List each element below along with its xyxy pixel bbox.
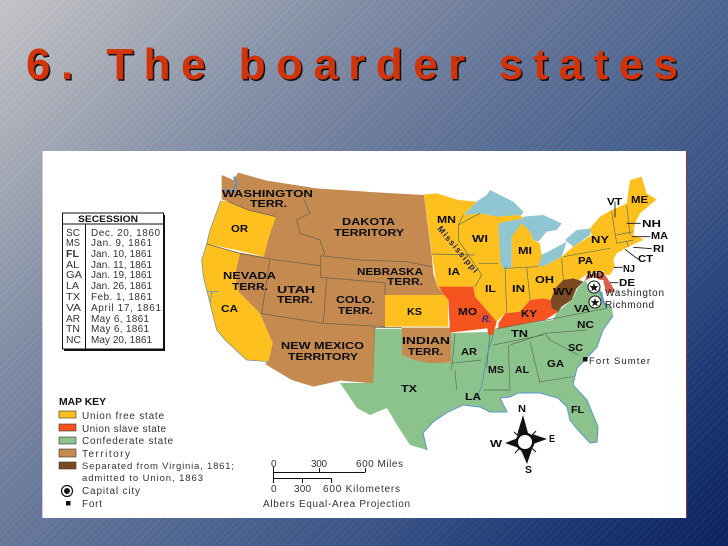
- panel: secession table: Jan. 11, 1861: [91, 260, 152, 271]
- state and territory labels: ME: [631, 194, 648, 206]
- state and territory labels: RI: [653, 243, 664, 255]
- icon: capital Washington: ★: [589, 280, 599, 294]
- state and territory labels: WV: [553, 286, 573, 298]
- panel: secession table: SC: [66, 228, 80, 239]
- state and territory labels: COLO.: [336, 294, 375, 306]
- fort marker: Fort Sumter: Fort Sumter: [589, 356, 650, 367]
- state and territory labels: NH: [642, 218, 661, 230]
- panel: secession table: May 6, 1861: [91, 314, 149, 325]
- state and territory labels: [221, 188, 668, 416]
- panel: secession table: AR: [66, 314, 80, 325]
- panel: secession table: [62, 213, 165, 351]
- compass rose: W: [490, 438, 502, 450]
- state and territory labels: NEBRASKA: [357, 266, 423, 278]
- icon: capital Richmond: [589, 296, 654, 311]
- scale bar: 600 Kilometers: [323, 484, 400, 495]
- scale bar: 0: [271, 459, 277, 470]
- panel: map key legend: Capital city: [82, 486, 140, 497]
- state and territory labels: MI: [518, 245, 532, 257]
- panel: map key legend: Union slave state: [82, 424, 166, 435]
- map of the United States: [202, 173, 668, 510]
- panel: secession table: Jan. 19, 1861: [91, 270, 152, 281]
- compass rose: S: [525, 464, 532, 476]
- panel: map card: [42, 151, 687, 518]
- panel: secession table: MS: [66, 238, 80, 249]
- state and territory labels: KY: [521, 308, 537, 320]
- state and territory labels: WASHINGTON: [222, 188, 313, 200]
- panel: secession table: LA: [66, 281, 79, 292]
- river label: Mississippi R.: R.: [482, 314, 491, 324]
- compass rose: E: [549, 433, 555, 445]
- state and territory labels: NEW MEXICO: [281, 340, 364, 352]
- state and territory labels: NJ: [623, 263, 635, 275]
- panel: map key legend: Territory: [82, 449, 130, 460]
- panel: map key legend: Confederate state: [82, 436, 173, 447]
- panel: secession table: Dec. 20, 1860: [91, 228, 160, 239]
- state and territory labels: TX: [401, 383, 417, 395]
- panel: secession table: Feb. 1, 1861: [91, 292, 152, 303]
- state and territory labels: TERR.: [408, 346, 443, 358]
- state and territory labels: TERR.: [232, 281, 268, 293]
- state and territory labels: TERR.: [387, 276, 423, 288]
- state and territory labels: MN: [437, 214, 456, 226]
- gulf and atlantic coastline: [423, 316, 613, 450]
- state and territory labels: AL: [515, 364, 530, 376]
- panel: map key legend: MAP KEY: [59, 397, 106, 408]
- panel: secession table: May 6, 1861: [91, 324, 149, 335]
- panel: secession table: Jan. 9, 1861: [91, 238, 152, 249]
- panel: map key legend: Fort: [82, 499, 102, 510]
- state and territory labels: PA: [578, 255, 593, 267]
- scale bar: Albers Equal-Area Projection: [263, 499, 410, 510]
- state and territory labels: TN: [511, 328, 528, 340]
- panel: secession table: FL: [66, 249, 79, 260]
- scale bar: [263, 459, 410, 510]
- state and territory labels: AR: [461, 346, 477, 358]
- state and territory labels: VA: [574, 303, 590, 315]
- state and territory labels: CT: [638, 253, 654, 265]
- scale bar: 300: [294, 484, 311, 495]
- icon: capital Richmond: ★: [590, 296, 600, 310]
- state and territory labels: IN: [512, 283, 525, 295]
- state and territory labels: INDIAN: [402, 335, 450, 347]
- state and territory labels: OH: [535, 274, 554, 286]
- state and territory labels: IL: [485, 283, 497, 295]
- panel: secession table: NC: [66, 335, 81, 346]
- state and territory labels: MO: [458, 306, 477, 318]
- state and territory labels: LA: [465, 391, 481, 403]
- state and territory labels: MS: [488, 364, 504, 376]
- eastern states and great lakes: [424, 177, 657, 400]
- title: 6. The boarder states: [26, 40, 678, 89]
- panel: secession table: Jan. 26, 1861: [91, 281, 152, 292]
- state and territory labels: NC: [577, 319, 594, 331]
- panel: secession table: TN: [66, 324, 80, 335]
- panel: secession table: AL: [66, 260, 79, 271]
- panel: secession table: VA: [66, 303, 81, 314]
- panel: map key legend: [59, 397, 234, 510]
- state and territory labels: TERR.: [277, 294, 313, 306]
- panel: secession table: Jan. 10, 1861: [91, 249, 152, 260]
- icon: capital Washington: [588, 280, 664, 299]
- state and territory labels: DAKOTA: [342, 216, 395, 228]
- panel: map key legend: admitted to Union, 1863: [82, 473, 203, 484]
- confederate states: [340, 280, 613, 450]
- panel: secession table: May 20, 1861: [91, 335, 152, 346]
- state and territory labels: NY: [591, 234, 609, 246]
- state and territory labels: TERR.: [250, 198, 287, 210]
- panel: map key legend: Separated from Virginia, 1861;: [82, 461, 234, 472]
- state and territory labels: DE: [619, 277, 635, 289]
- state and territory labels: VT: [607, 196, 623, 208]
- panel: secession table: TX: [66, 292, 80, 303]
- compass rose: N: [518, 403, 526, 415]
- state and territory labels: SC: [568, 342, 583, 354]
- scale bar: 300: [311, 459, 327, 470]
- panel: secession table: GA: [66, 270, 82, 281]
- state and territory labels: WI: [472, 233, 488, 245]
- title: 6. The boarder states: [28, 42, 680, 90]
- scale bar: 600 Miles: [356, 459, 403, 470]
- state and territory labels: TERRITORY: [334, 227, 404, 239]
- state and territory labels: IA: [448, 266, 460, 278]
- state and territory labels: NEVADA: [223, 270, 277, 282]
- river label: Mississippi R.: Mississippi: [435, 224, 480, 275]
- icon: capital Washington: Washington: [605, 288, 664, 299]
- scale bar: 0: [271, 484, 277, 495]
- panel: map key legend: Union free state: [82, 411, 164, 422]
- panel: secession table: SECESSION: [78, 214, 138, 225]
- state and territory labels: FL: [571, 404, 585, 416]
- state and territory labels: CA: [221, 303, 238, 315]
- western territories and states: [202, 173, 451, 387]
- state and territory labels: OR: [231, 223, 248, 235]
- river label: Mississippi R.: [435, 224, 491, 324]
- state and territory labels: UTAH: [277, 284, 315, 296]
- panel: secession table: April 17, 1861: [91, 303, 161, 314]
- state and territory labels: MA: [651, 230, 668, 242]
- state and territory labels: TERR.: [338, 305, 373, 317]
- compass rose: [490, 403, 555, 476]
- state and territory labels: GA: [547, 358, 564, 370]
- state and territory labels: KS: [407, 306, 422, 318]
- state and territory labels: TERRITORY: [288, 351, 358, 363]
- icon: capital Richmond: Richmond: [605, 300, 654, 311]
- state and territory labels: MD: [587, 269, 604, 281]
